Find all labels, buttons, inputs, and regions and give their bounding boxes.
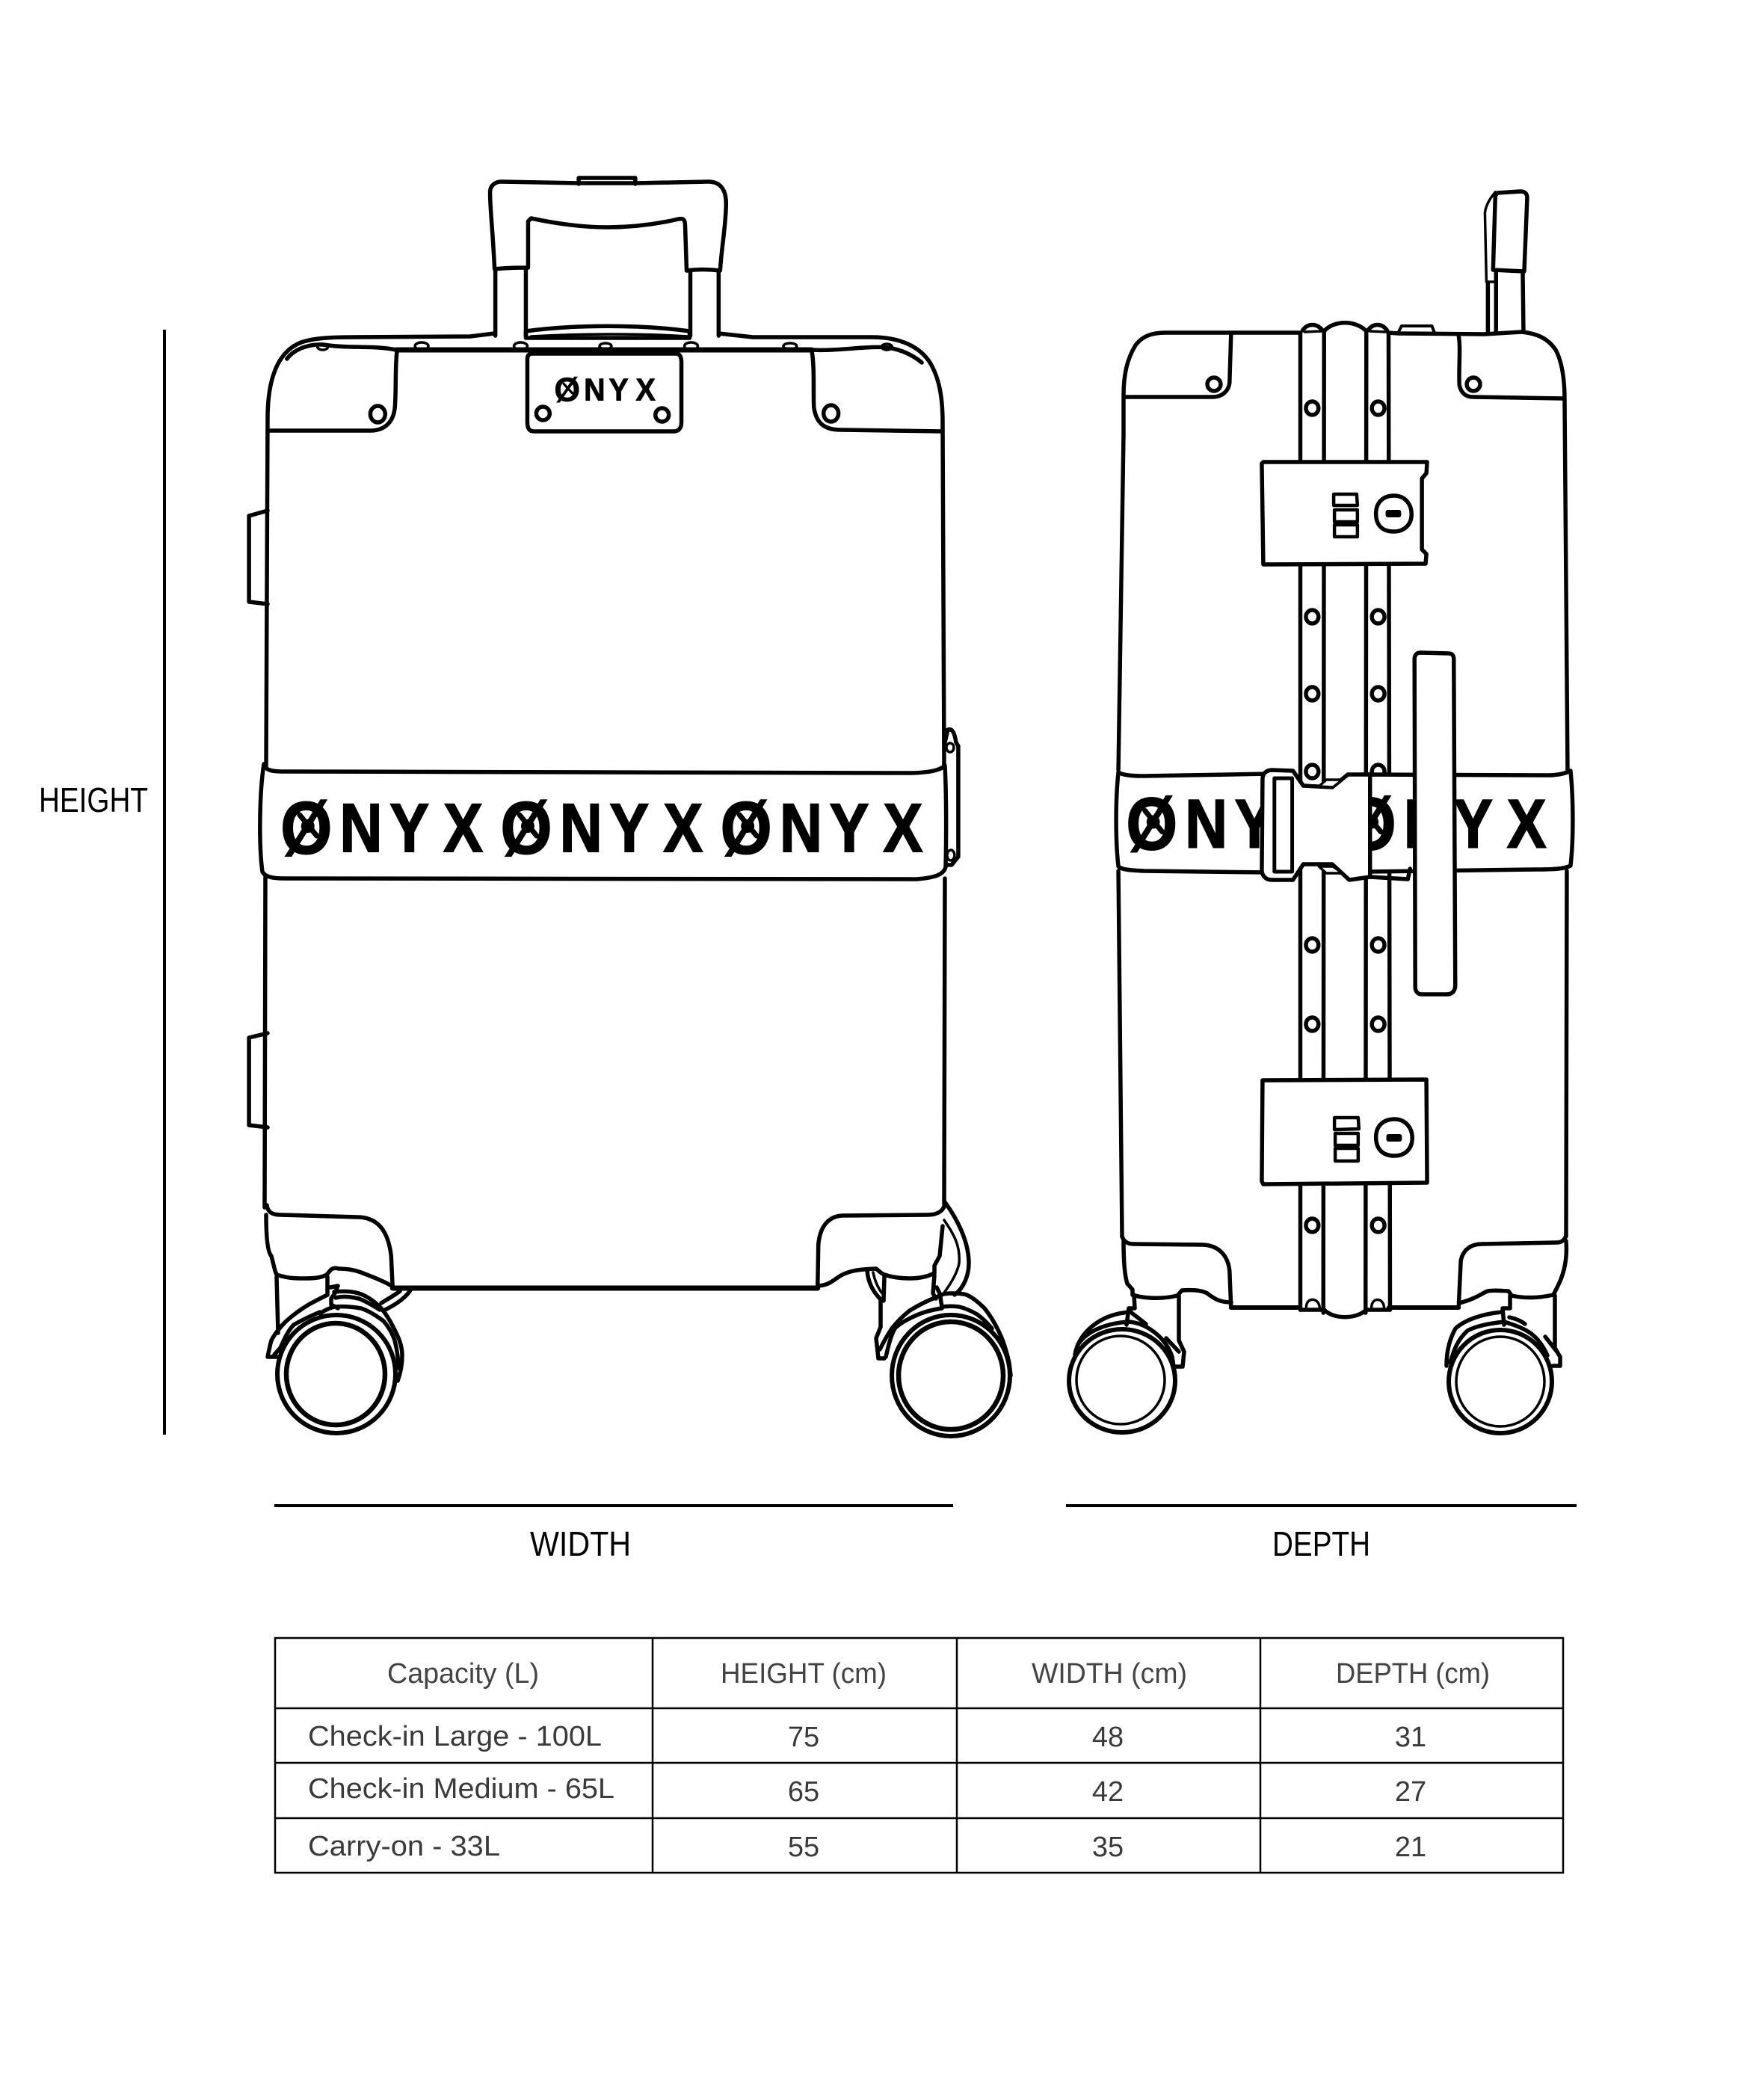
strap logo 3: [720, 787, 922, 870]
row: Check-in Medium: 42: [1092, 1776, 1124, 1808]
side left wheel: [1069, 1241, 1231, 1432]
strap logo 3: Ø: [720, 787, 772, 870]
side strap logo right: NYX: [1404, 786, 1546, 863]
height label: HEIGHT: [39, 780, 148, 819]
bottom combination lock: [1262, 1080, 1427, 1184]
side strap logo left: Ø: [1126, 783, 1178, 866]
top combination lock: [1262, 462, 1427, 564]
depth measure line: [1066, 1504, 1577, 1507]
suitcase body: [265, 333, 945, 1207]
side tabs: [249, 511, 268, 1127]
strap logo 2: [500, 787, 703, 870]
side right wheel: [1446, 1241, 1566, 1433]
table header: DEPTH (cm): [1336, 1658, 1490, 1690]
strap side buckle: [945, 730, 958, 865]
plate logo: NYX: [584, 372, 656, 407]
row: Carry-on: Carry-on - 33L: [308, 1831, 500, 1862]
row: Carry-on: [308, 1831, 1426, 1863]
row: Check-in Medium: Check-in Medium - 65L: [308, 1773, 614, 1805]
side strap logo left: NYX: [1185, 786, 1328, 863]
strap logo 2: NYX: [560, 789, 703, 866]
side strap: [1116, 771, 1573, 872]
side strap logo right: Ø: [1344, 783, 1396, 866]
side strap logo right: [1344, 783, 1546, 866]
row: Carry-on: 21: [1395, 1832, 1426, 1863]
plate logo: [554, 371, 656, 409]
lower body corners: [267, 1202, 945, 1288]
row: Check-in Medium: 65: [788, 1776, 819, 1808]
depth label: DEPTH: [1272, 1524, 1370, 1563]
row: Check-in Large: [308, 1721, 1426, 1753]
side carry handle: [1414, 653, 1455, 994]
side strap logo left: [1126, 783, 1328, 866]
plate logo: Ø: [554, 371, 580, 409]
table header: [387, 1658, 1490, 1690]
strap logo 3: NYX: [780, 789, 922, 866]
centre rails: [1300, 323, 1390, 1317]
height measure line: [163, 330, 166, 1435]
width label: WIDTH: [530, 1524, 631, 1563]
luggage strap: [260, 764, 946, 879]
front view suitcase: [249, 178, 1011, 1436]
left wheel assembly: [266, 1215, 411, 1433]
strap release buckle: [1262, 770, 1410, 880]
row: Check-in Large: 75: [788, 1722, 819, 1753]
row: Carry-on: 35: [1092, 1832, 1124, 1863]
side body: [1118, 326, 1568, 1237]
row: Check-in Large: 31: [1395, 1722, 1426, 1753]
side view suitcase: [1069, 191, 1573, 1433]
side lower corners: [1122, 1235, 1566, 1308]
row: Carry-on: 55: [788, 1832, 819, 1863]
right wheel assembly: [818, 1202, 1011, 1436]
side handle: [1485, 191, 1527, 332]
width measure line: [274, 1504, 953, 1507]
telescopic handle: [490, 178, 726, 338]
table header: Capacity (L): [387, 1658, 539, 1690]
strap logo 1: [280, 787, 483, 870]
row: Check-in Medium: [308, 1773, 1426, 1808]
strap logo 1: Ø: [280, 787, 333, 870]
table header: WIDTH (cm): [1032, 1658, 1187, 1690]
dimensions table: [274, 1637, 1564, 1873]
strap logo 2: Ø: [500, 787, 552, 870]
row: Check-in Large: Check-in Large - 100L: [308, 1721, 602, 1752]
table header: HEIGHT (cm): [721, 1658, 887, 1690]
strap logo 1: NYX: [340, 789, 483, 866]
row: Check-in Large: 48: [1092, 1722, 1124, 1753]
table grid: [274, 1637, 1564, 1873]
brand plate: [527, 354, 682, 431]
rail rivets: [1306, 401, 1384, 1232]
row: Check-in Medium: 27: [1395, 1776, 1426, 1808]
